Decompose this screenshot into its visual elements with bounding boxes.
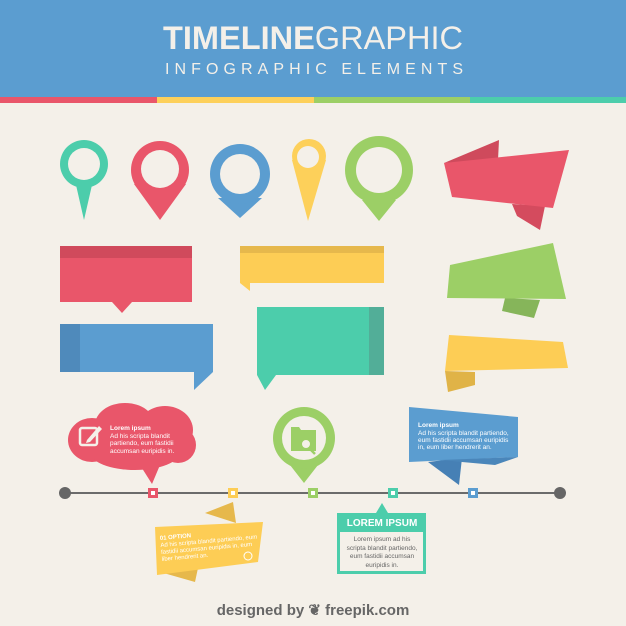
- callout: teal box: [337, 503, 426, 574]
- yellow ribbon: [445, 335, 568, 392]
- callout: green pin with folder: [273, 407, 335, 483]
- footer credit: designed by ❦ freepik.com: [217, 602, 409, 619]
- callout: blue ribbon: Lorem ipsum: [418, 422, 459, 429]
- subtitle: INFOGRAPHIC ELEMENTS: [165, 61, 463, 78]
- green ribbon: [447, 243, 566, 318]
- icon: edit: [80, 426, 102, 445]
- teal speech box: [257, 307, 384, 390]
- yellow speech box: [240, 246, 384, 291]
- callout: yellow ribbon: liber hendrerit an.: [161, 553, 209, 563]
- callout: teal box: euripidis in.: [366, 562, 399, 569]
- callout: red cloud: [68, 403, 196, 484]
- callout: red cloud: Lorem ipsum: [110, 425, 151, 432]
- icon: yellow pin: [292, 139, 326, 221]
- callout: yellow ribbon: [155, 502, 263, 582]
- callout: teal box: Lorem ipsum ad his: [354, 536, 411, 543]
- title: TIMELINEGRAPHIC: [163, 20, 463, 56]
- red speech box: [60, 246, 192, 313]
- callout: yellow ribbon: fastidii accumsan euripidis in, eum: [161, 542, 252, 556]
- icon: folder search: [291, 427, 316, 454]
- icon: teal pin: [60, 140, 108, 220]
- callout: teal box: eum fastidii accumsan: [350, 553, 415, 560]
- callout: teal box: LOREM IPSUM: [347, 518, 417, 529]
- blue speech box: [60, 324, 213, 390]
- icon: red pin: [131, 141, 189, 220]
- callout: blue ribbon: Ad his scripta blandit partiendo,: [418, 430, 509, 437]
- callout: yellow ribbon: 01 OPTION: [160, 533, 191, 542]
- callout: blue ribbon: in, eum liber hendrerit an.: [418, 444, 492, 451]
- callout: blue ribbon: eum fastidii accumsan euripidis: [418, 437, 509, 444]
- callout: red cloud: accumsan euripidis in.: [110, 448, 175, 455]
- header banner: [0, 0, 626, 103]
- red ribbon: [444, 140, 569, 230]
- callout: teal box: scripta blandit partiendo,: [347, 545, 418, 552]
- callout: yellow ribbon: Ad his scripta blandit partiendo, eum: [160, 535, 257, 549]
- icon: blue pin: [210, 144, 270, 218]
- icon: green pin: [345, 136, 413, 221]
- callout: blue ribbon: [409, 407, 518, 485]
- timeline line: [59, 487, 566, 499]
- callout: red cloud: Ad his scripta blandit: [110, 433, 170, 440]
- callout: red cloud: partiendo, eum fastidii: [110, 440, 174, 447]
